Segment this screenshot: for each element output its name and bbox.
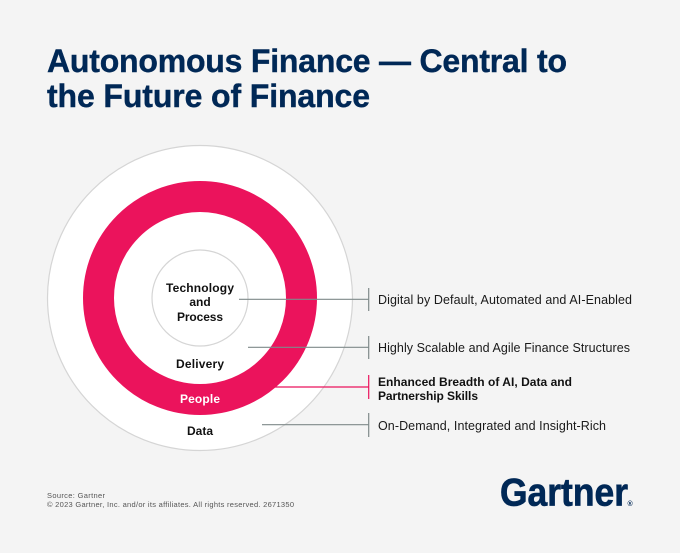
text: Enhanced Breadth <box>378 375 572 403</box>
label: Technology and Process <box>166 281 234 324</box>
ring: People <box>98 196 302 400</box>
label: Technology and Process: Technology <box>166 281 234 295</box>
text: Digital by Default: Digital by Default, Automated and AI-Enabled <box>378 293 632 307</box>
text: Enhanced Breadth: Enhanced Breadth of AI, Data and <box>378 375 572 389</box>
source note: © 2023 Gartner, Inc. and/or its affiliates. All rights reserved. 2671350 <box>47 500 294 509</box>
concentric circle diagram <box>48 146 352 450</box>
title: Autonomous Finance — Central to <box>47 43 567 79</box>
label: Technology and Process: and <box>189 295 211 309</box>
label: Data: Data <box>187 424 213 438</box>
source note <box>47 491 294 509</box>
ring: Technology and Process <box>152 250 248 346</box>
logo: Gartner: ® <box>628 500 634 508</box>
label: People: People <box>180 392 220 406</box>
leader: People <box>275 375 369 399</box>
label: Delivery: Delivery <box>176 357 224 371</box>
ring: Data <box>48 146 352 450</box>
leader: Technology and Process <box>239 288 369 311</box>
text: On-Demand: On-Demand, Integrated and Insight-Rich <box>378 419 606 433</box>
logo: Gartner: Gartner <box>500 472 628 514</box>
leader: Data <box>262 413 369 437</box>
source note: Source: Gartner <box>47 491 106 500</box>
leader: Delivery <box>248 336 369 359</box>
label: Technology and Process: Process <box>177 310 223 324</box>
text: Highly Scalable: Highly Scalable and Agile Finance Structures <box>378 341 630 355</box>
title <box>47 43 567 114</box>
text: Enhanced Breadth: Partnership Skills <box>378 389 478 403</box>
title: the Future of Finance <box>47 78 370 114</box>
